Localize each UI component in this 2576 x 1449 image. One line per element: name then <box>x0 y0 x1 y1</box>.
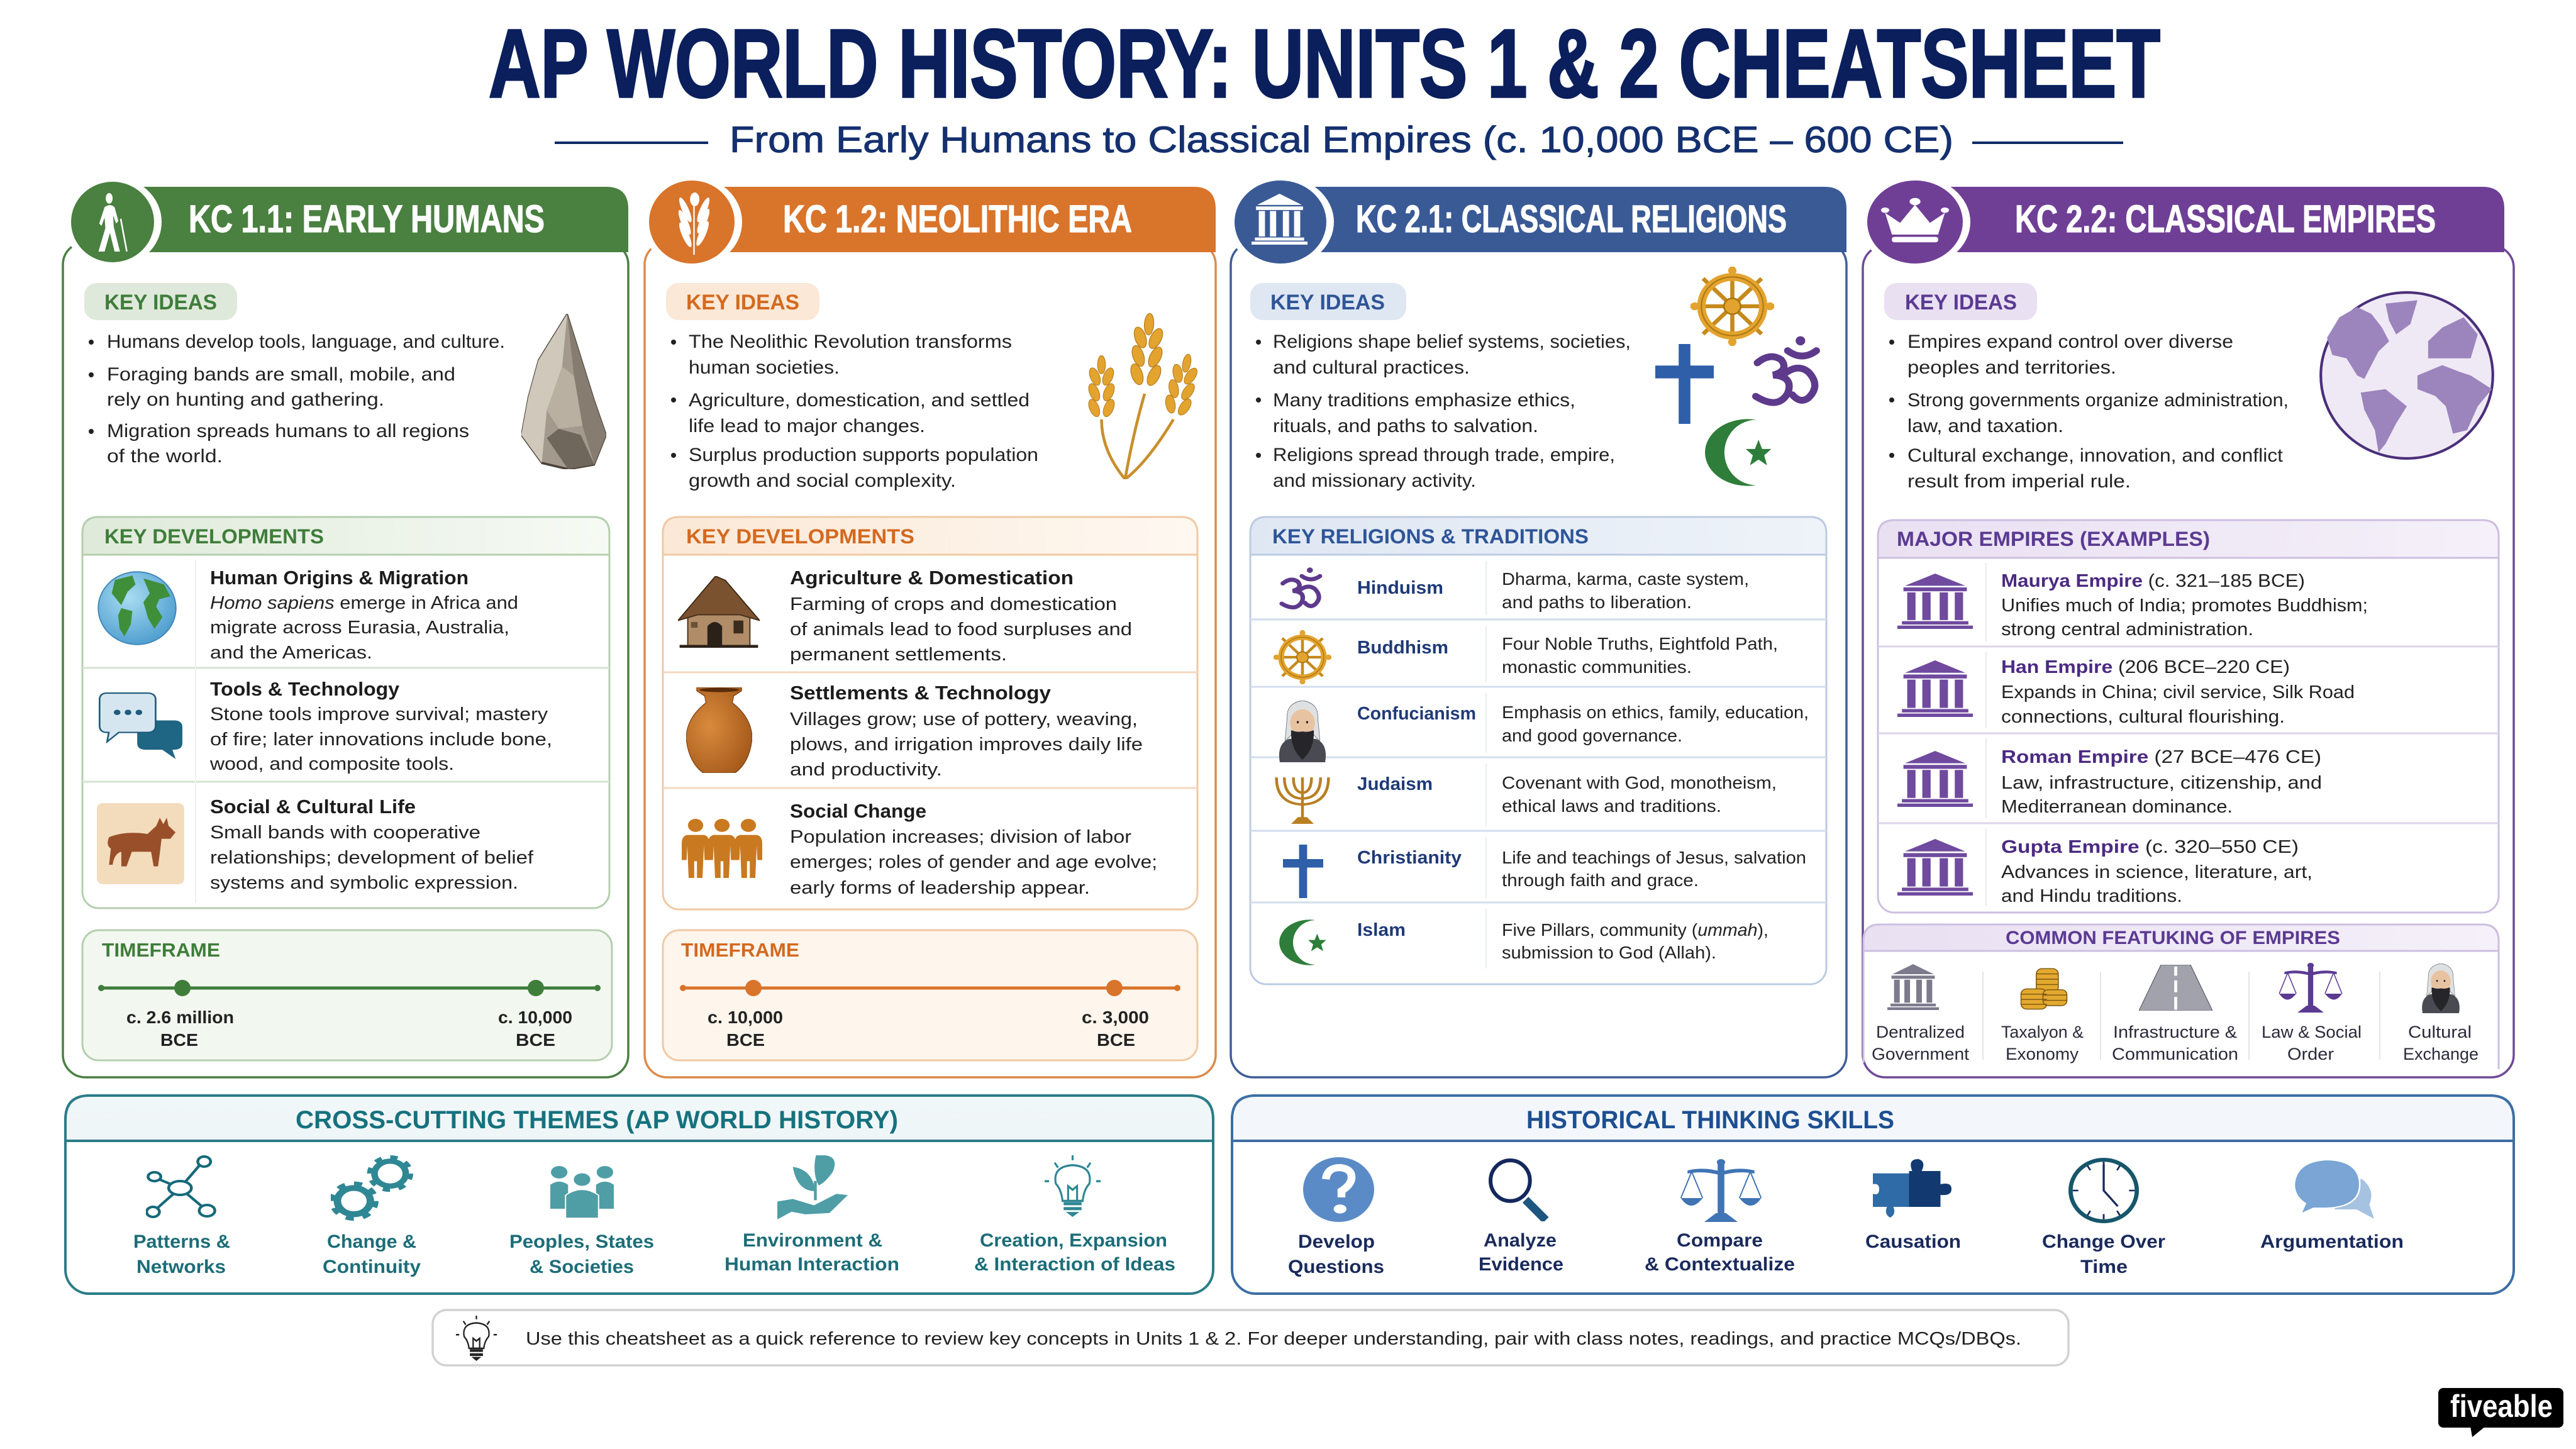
feature: government: Dentralized <box>1876 1023 1965 1041</box>
row: Maurya: strong central administration. <box>2001 619 2253 640</box>
icon: world globe <box>2321 292 2493 458</box>
panel: KC 1.1 Early Humans <box>63 177 628 1077</box>
text: tools: of fire; later innovations include bone, <box>210 730 552 750</box>
text: social change: Social Change <box>790 800 926 822</box>
theme: change and continuity: Continuity <box>323 1257 421 1277</box>
theme: environment: Environment & <box>743 1230 882 1251</box>
text: social: relationships; development of belief <box>210 848 534 868</box>
feature: infrastructure: Infrastructure & <box>2113 1023 2237 1041</box>
icon: wheat <box>1087 312 1203 479</box>
key ideas bullets: Many traditions emphasize ethics, <box>1273 390 1575 411</box>
theme: peoples, states, societies: Peoples, States <box>509 1231 654 1252</box>
feature: cultural exchange: Cultural <box>2408 1023 2472 1041</box>
header: KC 1.2 <box>641 176 1216 268</box>
text: agriculture: of animals lead to food surpluses and <box>790 619 1132 640</box>
key ideas bullets: Migration spreads humans to all regions <box>107 421 469 441</box>
skill: change over time <box>2042 1160 2165 1277</box>
row: Judaism: Judaism <box>1357 774 1433 794</box>
theme: peoples, states, societies: & Societies <box>530 1257 634 1277</box>
row: Han <box>1897 657 2355 727</box>
icon: speech bubbles <box>99 693 182 759</box>
skill: causation: Causation <box>1865 1231 1961 1252</box>
timeframe box: BCE <box>1097 1030 1135 1050</box>
skill: develop questions: Questions <box>1288 1257 1384 1277</box>
text: settlements <box>790 682 1143 780</box>
key ideas pill <box>84 283 237 320</box>
text: settlements: and productivity. <box>790 760 942 780</box>
panel: historical thinking skills <box>1232 1096 2514 1294</box>
key ideas bullets: Religions shape belief systems, societies, <box>1273 331 1631 352</box>
feature: taxation: Exonomy <box>2006 1045 2079 1063</box>
text: social: Small bands with cooperative <box>210 823 480 843</box>
row: Han: Expands in China; civil service, Silk Road <box>2001 682 2355 702</box>
timeframe box: TIMEFRAME <box>681 939 799 961</box>
common features box <box>1863 924 2499 1069</box>
logo: fiveable <box>2438 1388 2563 1437</box>
text: tools: Tools & Technology <box>210 678 400 700</box>
theme: patterns and networks: Networks <box>136 1257 226 1277</box>
text: social change: early forms of leadership appear. <box>790 878 1090 898</box>
key ideas bullets: Strong governments organize administration, <box>1907 390 2289 411</box>
text: social <box>210 796 534 893</box>
feature: law <box>2262 963 2362 1063</box>
feature: infrastructure <box>2112 965 2238 1063</box>
text: tools: wood, and composite tools. <box>209 754 454 774</box>
logo: fiveable: fiveable <box>2450 1389 2553 1424</box>
row: Islam: Islam <box>1357 920 1406 940</box>
skill: change over time: Change Over <box>2042 1231 2165 1252</box>
text: settlements: Villages grow; use of pottery, weaving, <box>790 709 1138 730</box>
skill: develop questions <box>1288 1157 1384 1277</box>
key ideas pill <box>666 283 819 320</box>
panel: cross-cutting themes: CROSS-CUTTING THEMES (AP WORLD HISTORY) <box>296 1106 898 1134</box>
skill: change over time: Time <box>2080 1257 2128 1277</box>
theme: peoples, states, societies <box>509 1166 654 1277</box>
text: human origins: migrate across Eurasia, Australia, <box>210 618 509 638</box>
feature: taxation <box>2001 969 2084 1063</box>
icon: stone tool <box>521 314 606 469</box>
row: Judaism: Covenant with God, monotheism, <box>1502 773 1777 792</box>
key ideas bullets: rely on hunting and gathering. <box>107 389 384 410</box>
timeframe box: c. 2.6 million <box>126 1008 234 1027</box>
key ideas pill: KEY IDEAS <box>686 291 799 314</box>
icon: three people <box>682 819 762 878</box>
row: Buddhism: monastic communities. <box>1502 657 1692 677</box>
icon: globe <box>98 572 176 645</box>
skill: compare and contextualize <box>1645 1159 1795 1275</box>
common features box: COMMON FEATUKING OF EMPIRES <box>2006 928 2340 948</box>
key ideas bullets: and missionary activity. <box>1273 470 1476 491</box>
key ideas bullets: Cultural exchange, innovation, and conflict <box>1907 445 2284 466</box>
text: human origins: Homo sapiens emerge in Africa and <box>210 593 518 613</box>
theme: patterns and networks: Patterns & <box>133 1231 230 1252</box>
header: KC 2.1: KC 2.1: CLASSICAL RELIGIONS <box>1356 197 1787 240</box>
text: agriculture <box>790 567 1132 665</box>
row: Buddhism: Buddhism <box>1357 638 1448 658</box>
text: social change: Population increases; division of labor <box>790 827 1131 847</box>
key ideas bullets: result from imperial rule. <box>1907 471 2131 492</box>
theme: creation of ideas: Creation, Expansion <box>980 1230 1167 1251</box>
key developments box: KEY DEVELOPMENTS <box>104 525 324 548</box>
icon: light bulb <box>456 1316 497 1361</box>
key ideas bullets: Empires expand control over diverse <box>1907 331 2233 352</box>
icons: religious symbols <box>1655 267 1816 486</box>
icon: pottery vase <box>686 687 752 773</box>
row: Roman <box>1897 747 2322 817</box>
key ideas bullets <box>671 331 1038 491</box>
timeframe box: BCE <box>726 1030 765 1050</box>
header: KC 2.1 <box>1227 176 1846 268</box>
row: Christianity: Christianity <box>1357 848 1462 868</box>
timeframe box: c. 10,000 <box>708 1008 783 1027</box>
key ideas bullets: Agriculture, domestication, and settled <box>689 390 1030 411</box>
header: KC 1.2: KC 1.2: NEOLITHIC ERA <box>783 197 1132 240</box>
row: Confucianism: and good governance. <box>1502 726 1682 745</box>
timeframe box: c. 3,000 <box>1082 1008 1149 1027</box>
header: KC 1.1: KC 1.1: EARLY HUMANS <box>189 197 545 240</box>
row: Christianity: through faith and grace. <box>1502 870 1699 890</box>
key ideas bullets: of the world. <box>107 446 223 467</box>
key religions box <box>1250 517 1826 984</box>
row: Maurya <box>1897 571 2368 640</box>
skill: analyze evidence <box>1479 1160 1563 1275</box>
row: Christianity: Life and teachings of Jesus, salvation <box>1502 848 1806 867</box>
key ideas pill: KEY IDEAS <box>1905 291 2017 314</box>
row: Gupta: Gupta Empire (c. 320–550 CE) <box>2001 837 2299 857</box>
text: settlements: Settlements & Technology <box>790 682 1052 704</box>
row: Confucianism: Emphasis on ethics, family, education, <box>1502 702 1809 722</box>
row: Hinduism: and paths to liberation. <box>1502 592 1692 612</box>
subtitle with rules <box>555 119 2123 160</box>
key developments box <box>663 517 1197 909</box>
key developments box <box>82 517 609 908</box>
text: human origins: Human Origins & Migration <box>210 567 469 589</box>
key ideas bullets: Humans develop tools, language, and culture. <box>107 331 505 352</box>
key ideas bullets: rituals, and paths to salvation. <box>1273 416 1538 436</box>
row: Confucianism: Confucianism <box>1357 704 1476 724</box>
row: Maurya: Maurya Empire (c. 321–185 BCE) <box>2001 571 2305 591</box>
header: KC 2.2 <box>1860 176 2504 268</box>
theme: creation of ideas <box>974 1155 1175 1275</box>
theme: change and continuity: Change & <box>327 1231 416 1252</box>
major empires box <box>1878 520 2499 913</box>
skill: compare and contextualize: Compare <box>1677 1230 1763 1251</box>
key ideas bullets: Foraging bands are small, mobile, and <box>107 364 455 385</box>
key ideas bullets <box>89 331 505 467</box>
row: Maurya: Unifies much of India; promotes Buddhism; <box>2001 596 2368 616</box>
row: Buddhism: Four Noble Truths, Eightfold Path, <box>1502 634 1778 653</box>
row: Han: Han Empire (206 BCE–220 CE) <box>2001 657 2290 677</box>
text: social change: emerges; roles of gender and age evolve; <box>790 852 1157 872</box>
key ideas pill <box>1884 283 2037 320</box>
text: agriculture: permanent settlements. <box>790 645 1007 665</box>
skill: develop questions: Develop <box>1298 1231 1375 1252</box>
skill: analyze evidence: Evidence <box>1479 1254 1563 1275</box>
feature: law: Order <box>2287 1045 2334 1063</box>
panel: cross-cutting themes <box>65 1096 1213 1294</box>
feature: law: Law & Social <box>2262 1023 2362 1041</box>
row: Judaism <box>1277 773 1777 824</box>
text: tools <box>209 678 552 774</box>
header: KC 2.2: KC 2.2: CLASSICAL EMPIRES <box>2015 197 2436 240</box>
row: Han: connections, cultural flourishing. <box>2001 707 2285 727</box>
skill: compare and contextualize: & Contextualize <box>1645 1254 1795 1275</box>
note box: Use this cheatsheet as a quick reference to review key concepts in Units 1 & 2. For deeper understanding, pair with class notes, readings, and practice MCQs/DBQs. <box>526 1329 2021 1349</box>
key ideas pill <box>1250 283 1406 320</box>
text: tools: Stone tools improve survival; mastery <box>210 704 548 724</box>
key religions box: KEY RELIGIONS & TRADITIONS <box>1272 525 1589 548</box>
row: Gupta: Advances in science, literature, art, <box>2001 862 2312 882</box>
text: agriculture: Agriculture & Domestication <box>790 567 1074 589</box>
key ideas bullets: life lead to major changes. <box>689 416 925 436</box>
skill: argumentation: Argumentation <box>2260 1231 2404 1252</box>
row: Roman: Mediterranean dominance. <box>2001 797 2233 817</box>
text: social change <box>790 800 1157 898</box>
timeline <box>98 980 601 996</box>
text: settlements: plows, and irrigation improves daily life <box>790 735 1143 755</box>
timeframe box: BCE <box>160 1030 198 1050</box>
timeframe box <box>82 930 612 1060</box>
skill: analyze evidence: Analyze <box>1484 1230 1557 1251</box>
row: Hinduism <box>1282 567 1749 612</box>
row: Roman: Law, infrastructure, citizenship, and <box>2001 773 2322 793</box>
feature: government: Government <box>1872 1045 1970 1063</box>
theme: creation of ideas: & Interaction of Ideas <box>974 1254 1175 1275</box>
text: human origins <box>210 567 518 663</box>
subtitle with rules: From Early Humans to Classical Empires (c. 10,000 BCE – 600 CE) <box>730 119 1953 160</box>
icon: hut <box>678 576 760 648</box>
key ideas bullets: The Neolithic Revolution transforms <box>689 331 1012 352</box>
feature: taxation: Taxalyon & <box>2001 1023 2084 1041</box>
skill: argumentation <box>2260 1160 2404 1252</box>
panel: KC 2.2 Classical Empires <box>1860 176 2514 1077</box>
key ideas bullets: Religions spread through trade, empire, <box>1273 445 1615 465</box>
text: human origins: and the Americas. <box>210 643 372 663</box>
text: social: systems and symbolic expression. <box>210 873 518 893</box>
key ideas bullets: and cultural practices. <box>1273 357 1470 378</box>
panel: historical thinking skills: HISTORICAL THINKING SKILLS <box>1526 1106 1894 1134</box>
key ideas pill: KEY IDEAS <box>104 291 217 314</box>
panel: KC 2.1 Classical Religions <box>1227 176 1846 1077</box>
panel: KC 1.2 Neolithic Era <box>641 176 1216 1077</box>
feature: government <box>1872 964 1970 1063</box>
feature: infrastructure: Communication <box>2112 1045 2238 1063</box>
row: Gupta: and Hindu traditions. <box>2001 886 2182 906</box>
row: Confucianism <box>1279 701 1809 762</box>
key ideas bullets: human societies. <box>689 357 840 378</box>
feature: cultural exchange <box>2403 963 2479 1063</box>
text: social: Social & Cultural Life <box>210 796 416 818</box>
key ideas pill: KEY IDEAS <box>1270 291 1385 314</box>
key ideas bullets: peoples and territories. <box>1907 357 2116 378</box>
theme: environment <box>724 1155 899 1275</box>
theme: change and continuity <box>323 1157 421 1277</box>
feature: cultural exchange: Exchange <box>2403 1045 2479 1063</box>
row: Christianity <box>1283 845 1806 898</box>
key ideas bullets: Surplus production supports population <box>689 445 1038 465</box>
row: Buddhism <box>1274 630 1778 684</box>
timeframe box: c. 10,000 <box>498 1008 572 1027</box>
major empires box: MAJOR EMPIRES (EXAMPLES) <box>1897 528 2210 550</box>
row: Islam: Five Pillars, community (ummah), <box>1502 920 1768 940</box>
skill: causation <box>1865 1159 1961 1252</box>
key ideas bullets <box>1256 331 1631 491</box>
timeline <box>680 980 1180 996</box>
key developments box: KEY DEVELOPMENTS <box>686 525 914 548</box>
row: Gupta <box>1897 837 2312 906</box>
timeframe box: TIMEFRAME <box>102 939 220 961</box>
row: Islam: submission to God (Allah). <box>1502 943 1716 962</box>
row: Hinduism: Hinduism <box>1357 578 1443 598</box>
key ideas bullets: law, and taxation. <box>1907 416 2063 436</box>
timeframe box <box>663 930 1197 1060</box>
row: Hinduism: Dharma, karma, caste system, <box>1502 569 1749 589</box>
row: Islam <box>1279 919 1768 965</box>
text: agriculture: Farming of crops and domestication <box>790 594 1117 614</box>
theme: environment: Human Interaction <box>724 1254 899 1275</box>
icon: cave painting animal <box>97 803 184 884</box>
timeframe box: BCE <box>516 1030 555 1050</box>
header: KC 1.1 <box>64 177 628 267</box>
row: Roman: Roman Empire (27 BCE–476 CE) <box>2001 747 2321 767</box>
key ideas bullets <box>1889 331 2289 492</box>
row: Judaism: ethical laws and traditions. <box>1502 796 1721 816</box>
theme: patterns and networks <box>133 1157 230 1277</box>
note box <box>433 1310 2068 1365</box>
key ideas bullets: growth and social complexity. <box>689 470 956 491</box>
